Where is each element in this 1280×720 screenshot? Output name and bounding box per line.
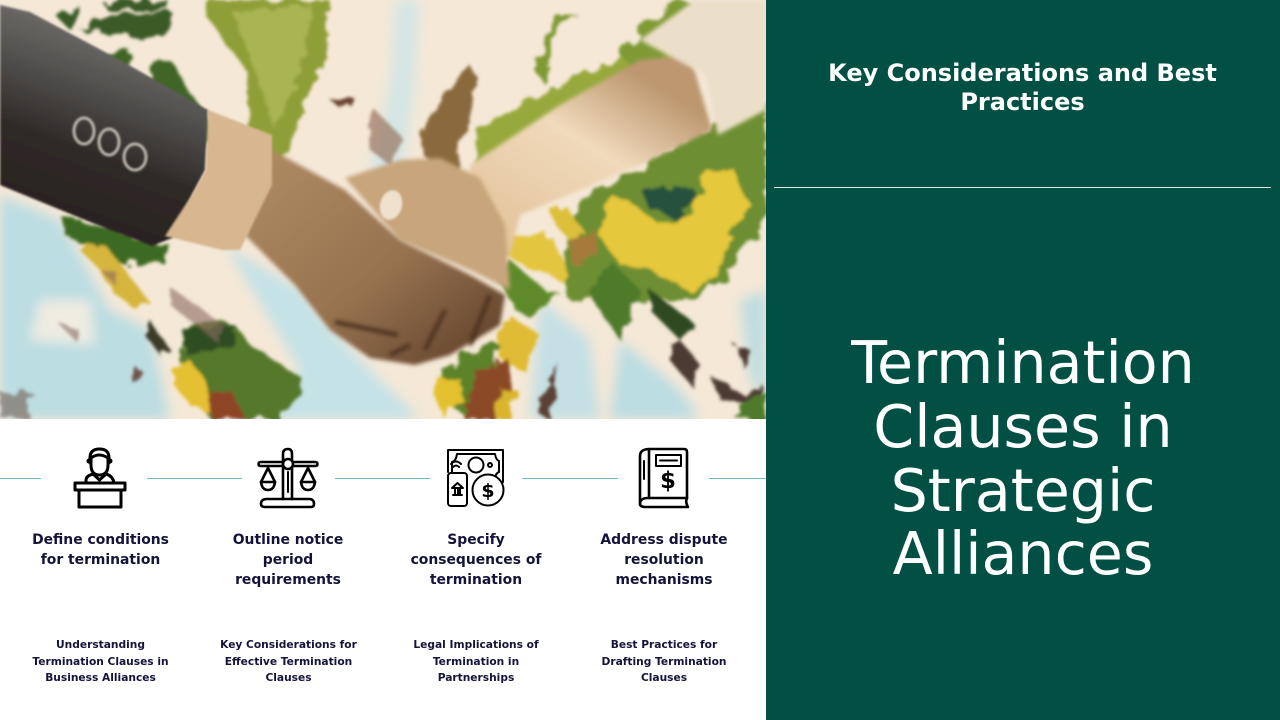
main title (851, 329, 1195, 588)
column 4 caption: Best Practices for (611, 638, 717, 651)
column 3 heading: termination (430, 572, 522, 588)
panel: title sidebar (766, 0, 1280, 720)
column 3 heading: consequences of (411, 552, 541, 568)
main title: Termination (851, 329, 1195, 397)
right hand (345, 158, 510, 290)
column 3 caption (413, 638, 539, 684)
column 2 heading (233, 532, 343, 588)
divider (774, 187, 1271, 188)
sleeve buttons (74, 118, 146, 170)
map background (0, 0, 766, 419)
icon: ledger book with dollar (638, 448, 690, 508)
right sleeve (640, 0, 766, 135)
column 4 heading (600, 532, 728, 588)
column 4 caption (602, 638, 726, 684)
column 4 heading: resolution (624, 552, 704, 568)
main title: Strategic (891, 457, 1155, 525)
column 3 caption: Legal Implications of (413, 638, 539, 651)
icon: money, phone and coin: $ (481, 480, 495, 502)
main title: Alliances (893, 520, 1153, 588)
shirt cuff (165, 110, 272, 250)
column 4 heading: Address dispute (600, 532, 728, 548)
column 2 caption: Effective Termination (225, 654, 352, 668)
heading: key considerations: Key Considerations and Best (828, 59, 1217, 87)
column 2 caption: Clauses (265, 671, 312, 684)
heading: key considerations: Practices (960, 88, 1085, 116)
column 1 caption: Termination Clauses in (32, 654, 169, 668)
finger shadows (335, 295, 490, 355)
column 2 heading: Outline notice (233, 532, 343, 548)
column 4 caption: Drafting Termination (602, 654, 726, 668)
column 4 heading: mechanisms (615, 572, 713, 588)
thumb nail (376, 188, 406, 222)
icon: money, phone and coin (447, 449, 504, 507)
column 1 caption (32, 638, 169, 684)
column 1 heading: for termination (41, 552, 160, 568)
main title: Clauses in (873, 393, 1173, 461)
icon: ledger book with dollar: $ (660, 468, 676, 494)
column 1 caption: Understanding (56, 638, 145, 651)
column 3 heading: Specify (447, 532, 505, 548)
column 2 heading: requirements (235, 572, 341, 588)
column 2 heading: period (263, 552, 313, 568)
timeline connector (0, 478, 766, 479)
column 1 heading (32, 532, 169, 568)
column 1 heading: Define conditions (32, 532, 169, 548)
column 3 caption: Partnerships (438, 671, 514, 684)
photo: handshake over a world map (0, 0, 766, 419)
column 4 caption: Clauses (641, 671, 687, 684)
left hand (245, 150, 505, 365)
right arm (470, 55, 712, 255)
icon: judge at podium (74, 448, 126, 508)
heading: key considerations (828, 59, 1217, 116)
column 3 caption: Termination in (433, 654, 519, 668)
icon: balance scales (257, 448, 319, 508)
column 2 caption (220, 638, 357, 684)
suit sleeve (0, 5, 208, 246)
column 2 caption: Key Considerations for (220, 638, 357, 651)
column 3 heading (411, 532, 542, 588)
column 1 caption: Business Alliances (45, 671, 156, 684)
